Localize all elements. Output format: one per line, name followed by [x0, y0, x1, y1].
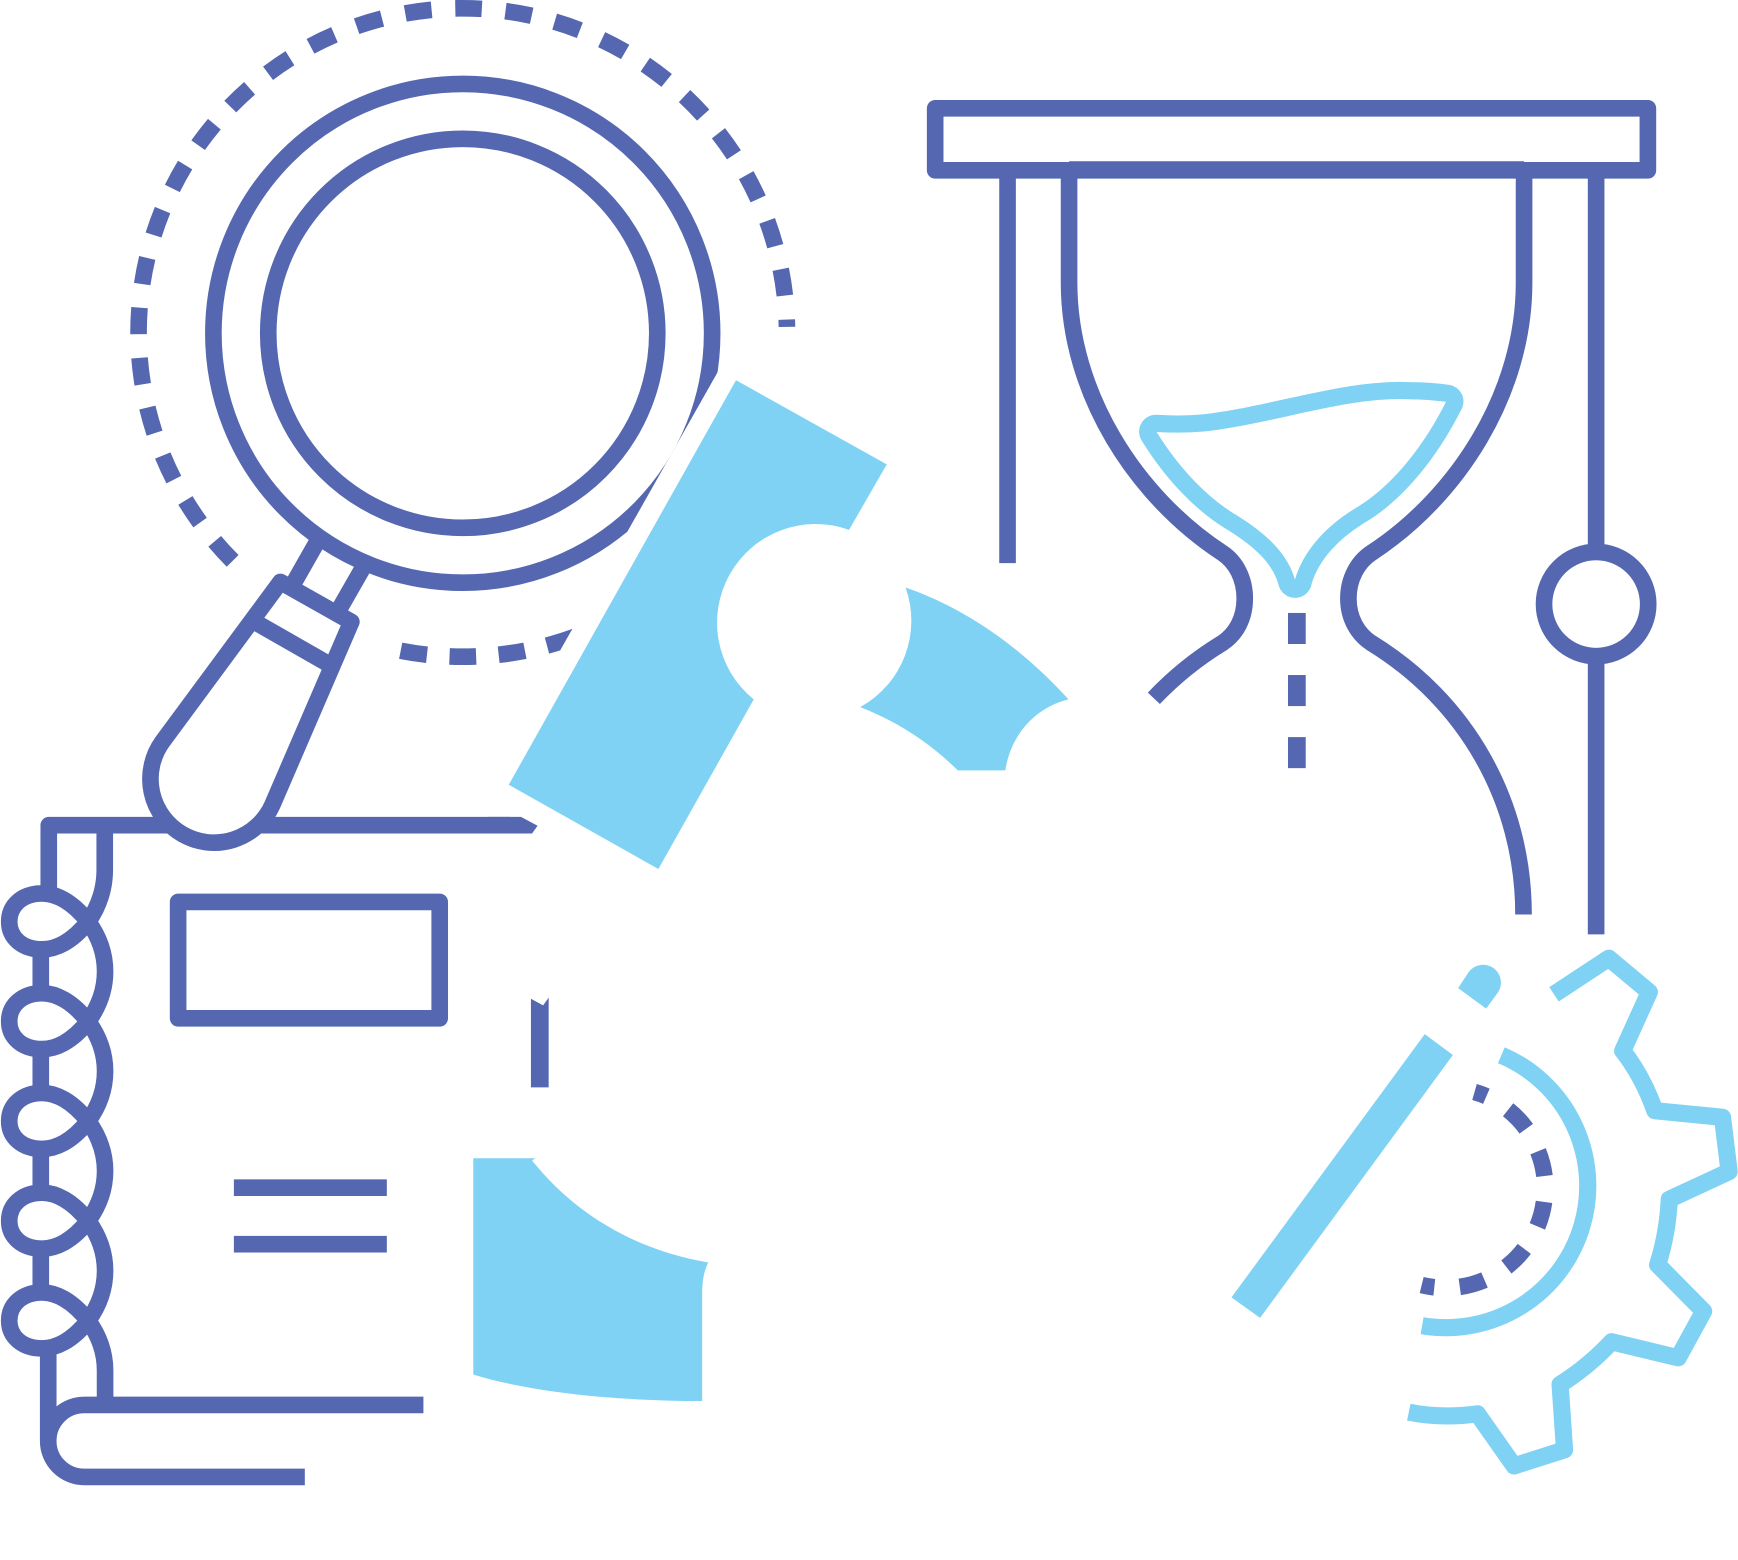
notebook right edge fragment	[531, 998, 549, 1087]
notebook top edge end	[488, 817, 538, 834]
lens inner ring	[268, 139, 657, 528]
dashed orbit: upper arc	[133, 3, 793, 662]
lens outer ring	[213, 84, 712, 583]
glass right side	[1348, 170, 1524, 914]
magnifying glass	[48, 0, 877, 822]
gear dashed arc	[1422, 1092, 1544, 1287]
spiral binding	[9, 893, 105, 1404]
pencil barrel	[509, 380, 887, 869]
gear	[1231, 958, 1729, 1466]
notebook outline	[49, 825, 510, 893]
pencil body in light blue	[473, 380, 1069, 1401]
pencil shaft	[1231, 1034, 1453, 1318]
hourglass top bar	[935, 108, 1648, 170]
gear inner arc	[1422, 1055, 1588, 1328]
right leg	[1589, 170, 1604, 934]
notebook	[9, 817, 549, 1477]
curved segment	[860, 587, 1069, 770]
falling sand dashes	[1288, 613, 1306, 768]
dashed orbit: lower arc	[48, 0, 877, 747]
notebook bottom pages	[48, 1348, 423, 1477]
hourglass	[935, 108, 1648, 934]
left leg	[1000, 170, 1015, 563]
label box	[178, 902, 440, 1018]
notebook inner margin	[88, 825, 105, 922]
gear outline	[1409, 958, 1729, 1466]
white cut band beside the pencil	[480, 305, 776, 822]
magnifying glass handle	[150, 582, 351, 843]
handle neck	[294, 534, 367, 607]
handle body	[150, 582, 351, 843]
text lines	[234, 1179, 387, 1253]
pencil tip	[1458, 965, 1501, 1009]
lower curved block	[473, 1158, 708, 1401]
handle collar	[253, 621, 330, 665]
leg knob	[1544, 552, 1648, 656]
glass left side	[1069, 170, 1524, 698]
sand upper	[1148, 390, 1455, 589]
